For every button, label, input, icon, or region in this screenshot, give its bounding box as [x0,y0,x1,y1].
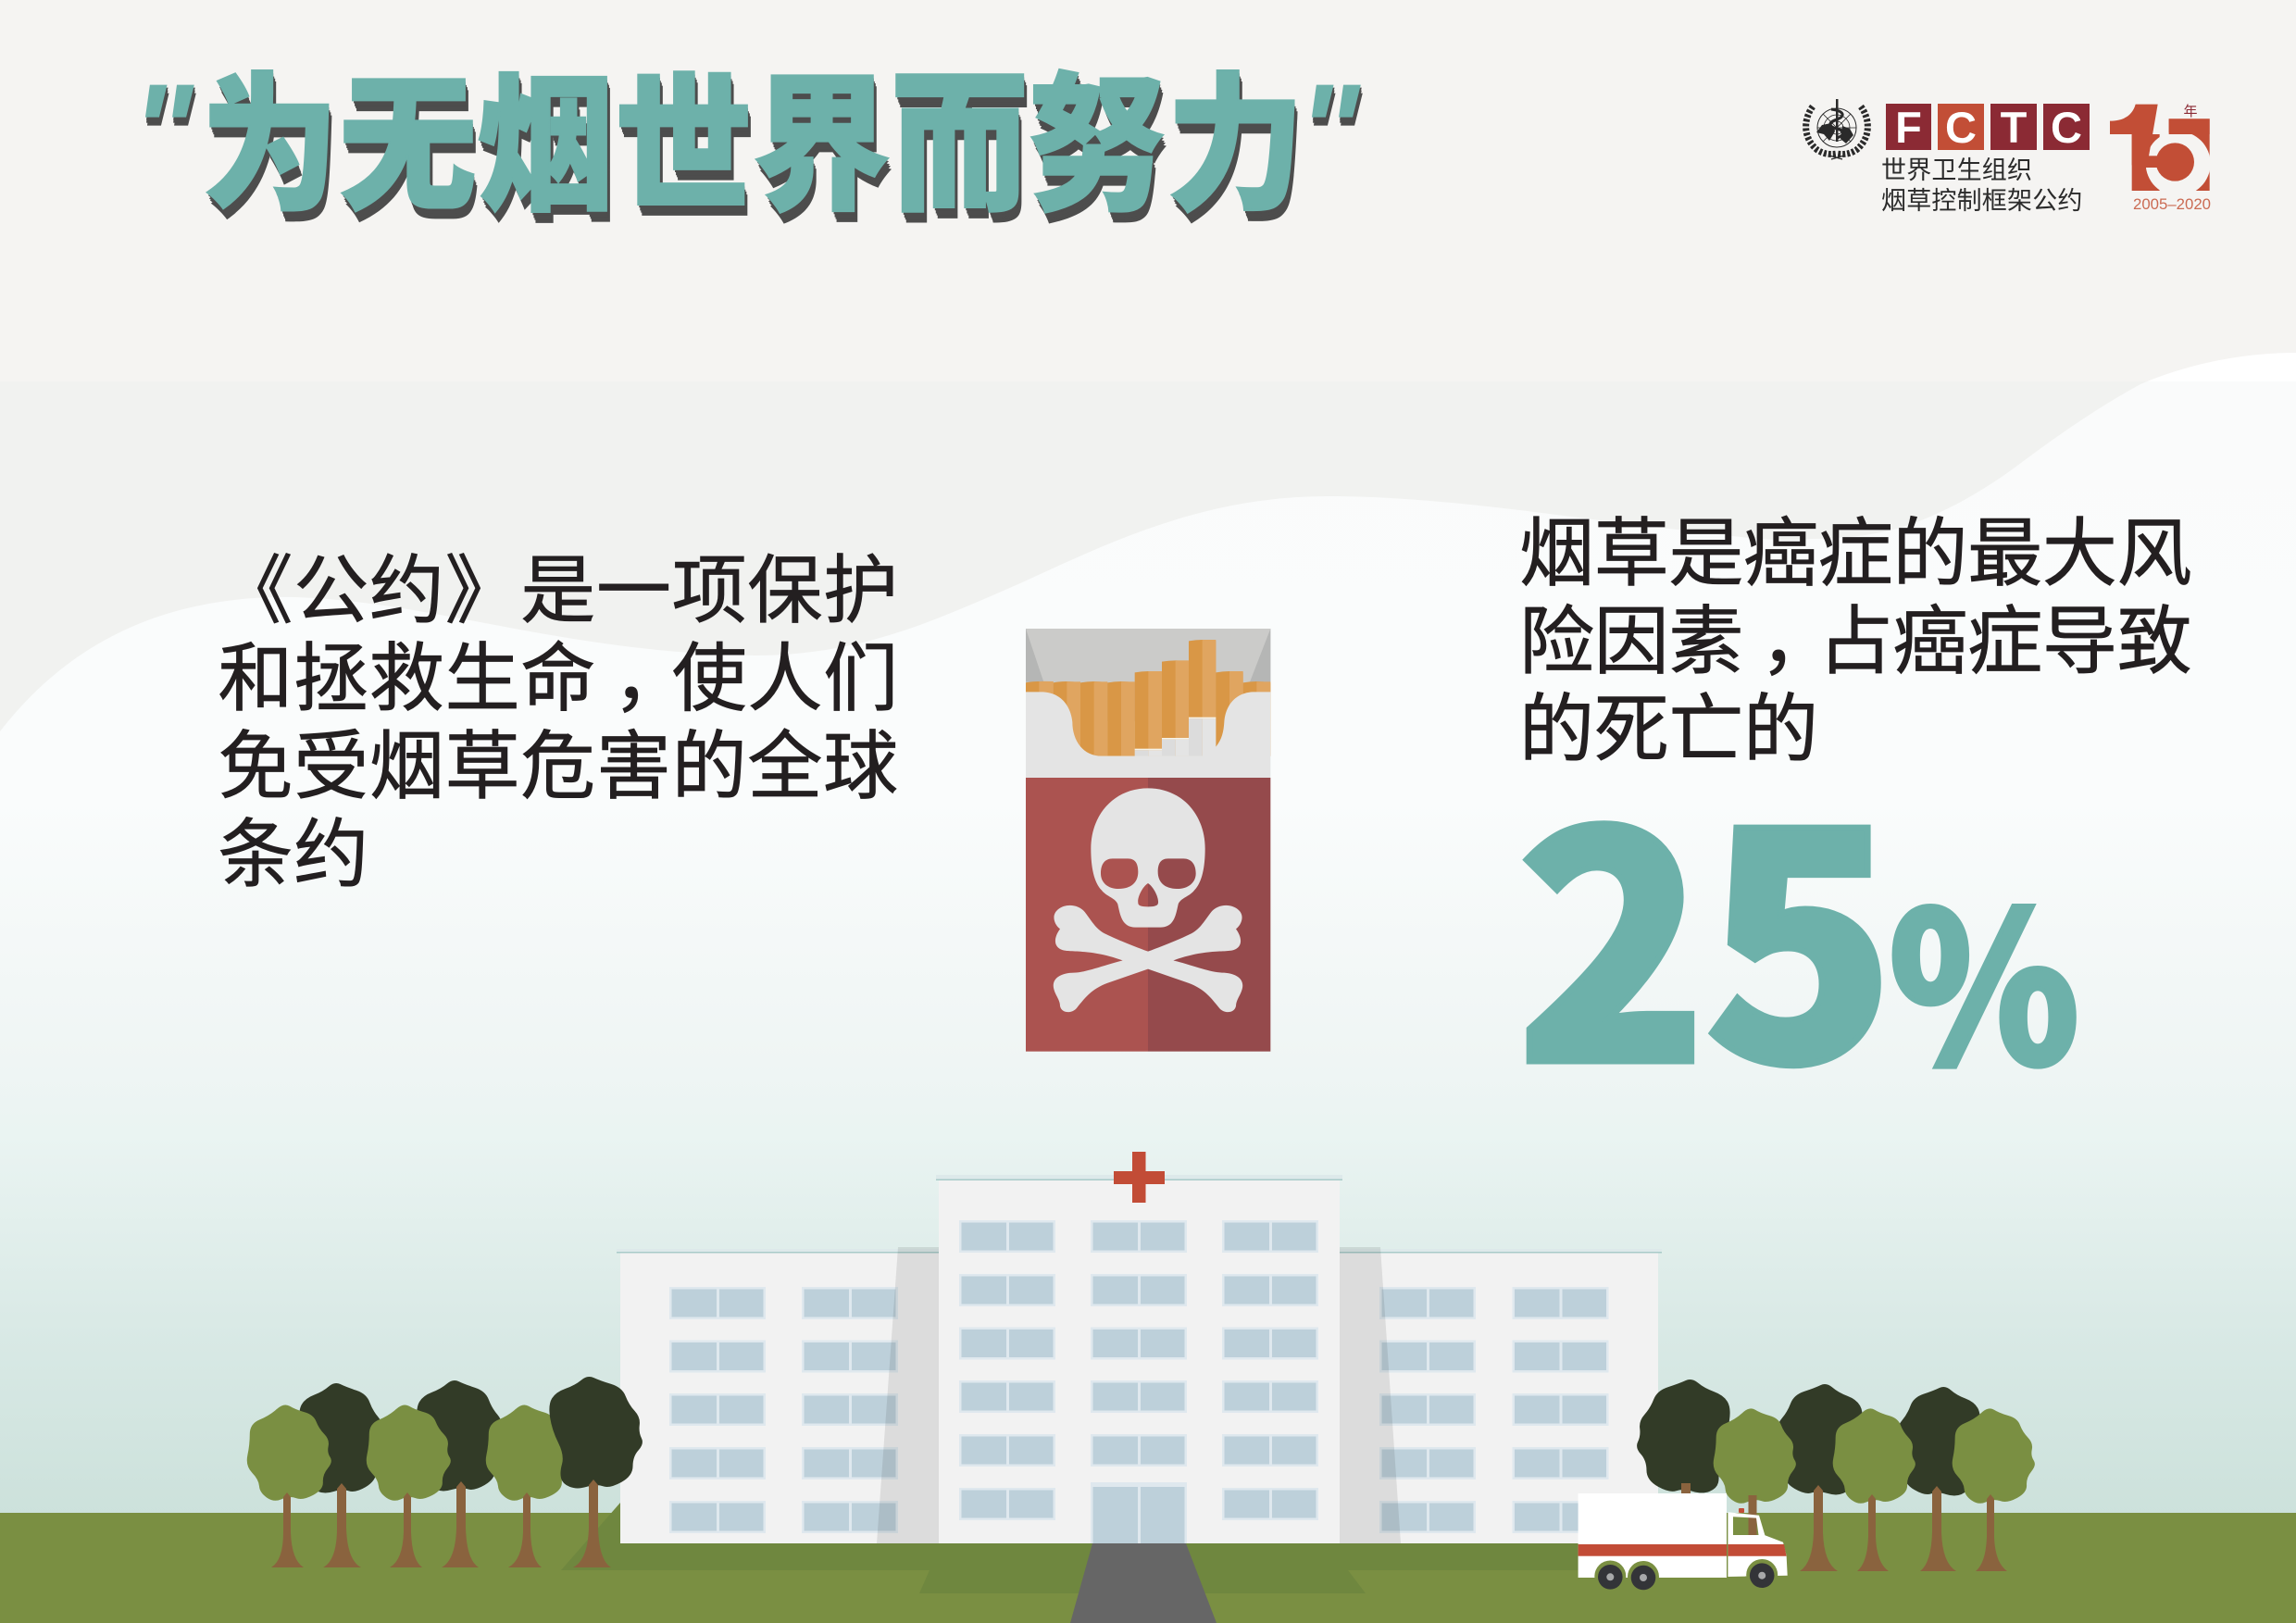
light tree [367,1405,451,1567]
right wing [1338,1249,1662,1543]
logo: organisation name [1881,156,2083,215]
logo: FCTC tiles: C [1945,103,1977,152]
big number: 25%: 5 [1704,699,1895,1152]
hospital building [617,1152,1662,1543]
road [1070,1543,1217,1623]
text block: treaty description line 3: 免受烟草危害的全球 [218,726,899,809]
logo: FCTC tiles [1886,103,2090,152]
dark tree [1637,1380,1730,1511]
title: " [1298,56,1359,202]
big number: 25%: 2 [1516,699,1707,1152]
text block: treaty description: 《公约》是一项保护 [218,550,899,633]
light tree [247,1405,331,1567]
logo: FCTC tiles: F [1895,103,1922,152]
trees: left group [247,1377,643,1567]
logo: organisation name: 世界卫生组织 [1881,156,2032,184]
logo: WHO emblem [1806,99,1867,159]
dark tree [1895,1387,1980,1571]
light tree [1714,1408,1796,1574]
icon: cigarette pack with skull [1026,629,1270,1052]
text block: treaty description line 4: 条约 [218,814,369,897]
light tree [1833,1408,1915,1571]
door [1091,1482,1187,1543]
ambulance [1578,1493,1788,1594]
left wing [617,1249,941,1543]
skull [1091,788,1205,928]
logo: 15 years: 2005–2020 [2133,195,2211,213]
big number: 25% [1516,699,2079,1152]
dark tree [299,1383,385,1567]
ground [0,1503,2296,1623]
text block: cancer risk statement: 险因素，占癌症导致 [1519,601,2191,684]
text block: cancer risk statement [1519,513,2191,772]
big number: 25%: % [1889,822,2079,1124]
cigarettes [1026,640,1270,756]
logo: 15 years: 年 [2183,104,2198,119]
red cross [1114,1152,1165,1203]
dark tree [549,1377,643,1567]
title: 为无烟世界而努力 [201,25,1304,241]
text block: cancer risk statement: 烟草是癌症的最大风 [1519,513,2191,596]
logo: 15 years [2110,104,2211,213]
light tree [1953,1408,2035,1571]
crossbones [1054,905,1242,1012]
trees: right group [1637,1380,2035,1574]
text block: cancer risk statement: 的死亡的 [1519,689,1818,772]
title: " [131,56,193,202]
centre block [936,1175,1342,1543]
logo: FCTC tiles: C [2051,103,2082,152]
logo: FCTC tiles: T [2001,103,2028,152]
dark tree [417,1380,505,1567]
light tree [486,1405,570,1567]
text block: treaty description line 2: 和拯救生命，使人们 [218,638,899,721]
logo: organisation name: 烟草控制框架公约 [1881,187,2083,215]
wheels [1592,1559,1778,1594]
dark tree [1775,1384,1863,1571]
